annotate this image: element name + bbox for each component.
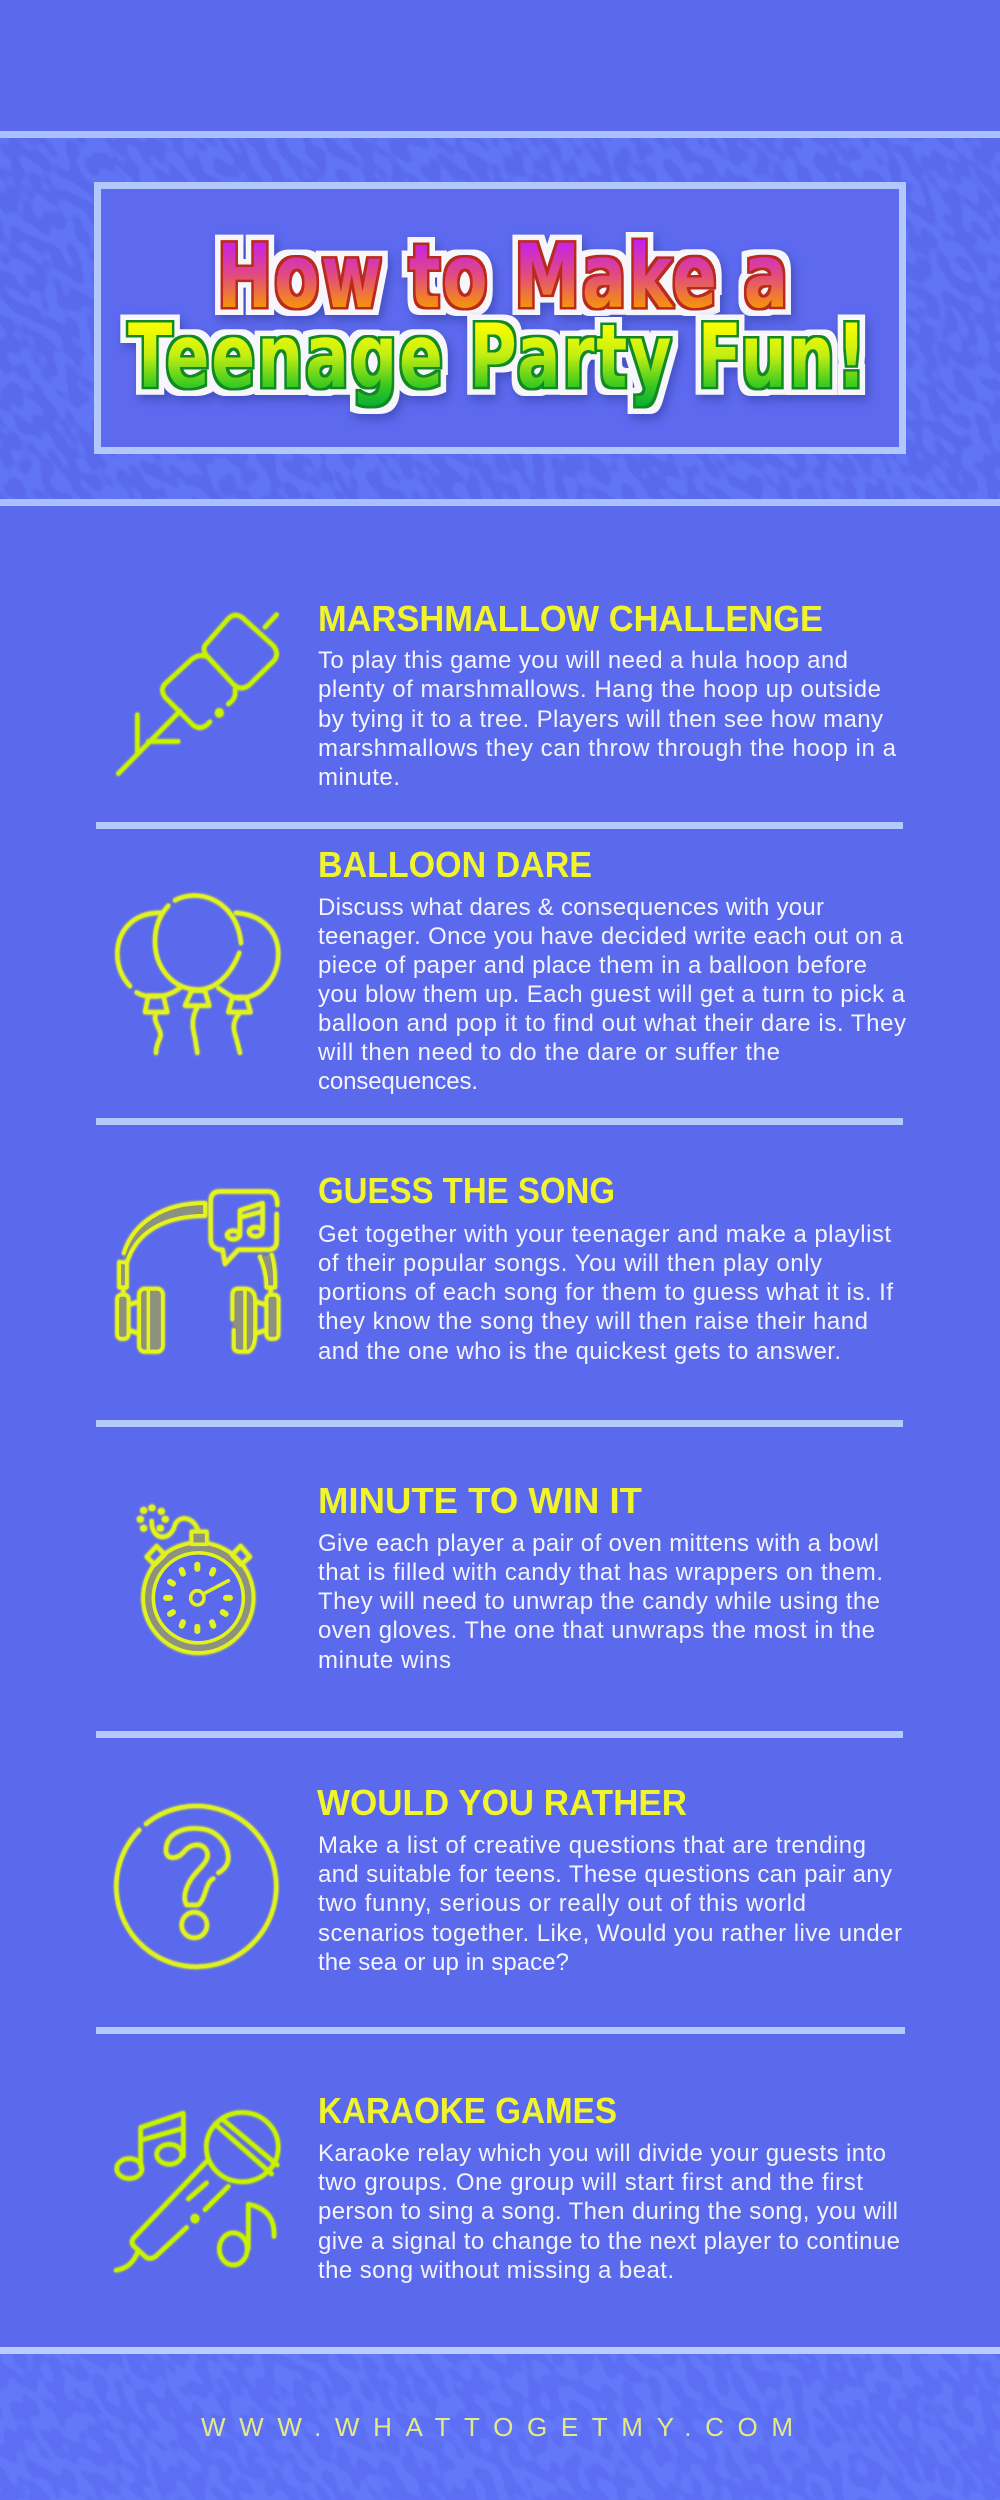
- body text: of their popular songs. You will then play only: [318, 1250, 822, 1277]
- body text: teenager. Once you have decided write each out on a: [318, 923, 904, 950]
- panel: balloon dare: [117, 844, 906, 1095]
- body text: marshmallows they can throw through the hoop in a: [318, 735, 897, 762]
- body text: two groups. One group will start first and the first: [318, 2169, 863, 2196]
- body text: minute wins: [318, 1647, 451, 1674]
- body text: Make a list of creative questions that are trending: [318, 1832, 866, 1859]
- icon: microphone and music notes: [116, 2112, 278, 2270]
- body text: To play this game you will need a hula hoop and: [318, 647, 848, 674]
- title line 1: How to Make a: [217, 225, 790, 328]
- icon: balloons: [117, 895, 278, 1053]
- body text: minute.: [318, 764, 400, 791]
- body text: you blow them up. Each guest will get a turn to pick a: [318, 981, 906, 1008]
- body text: portions of each song for them to guess what it is. If: [318, 1279, 893, 1306]
- body text: scenarios together. Like, Would you rather live under: [318, 1920, 902, 1947]
- icon: stopwatch with fuse: [140, 1508, 253, 1653]
- footer top rule: [0, 2347, 1000, 2354]
- body text: [318, 2140, 900, 2284]
- body text: the sea or up in space?: [318, 1949, 569, 1976]
- body text: piece of paper and place them in a balloon before: [318, 952, 867, 979]
- body text: [317, 894, 906, 1095]
- body text: will then need to do the dare or suffer the: [317, 1039, 780, 1066]
- divider: [96, 1118, 903, 1125]
- body text: Karaoke relay which you will divide your guests into: [318, 2140, 886, 2167]
- body text: Get together with your teenager and make a playlist: [318, 1221, 891, 1248]
- icon: marshmallows on a stick: [118, 615, 277, 774]
- divider: [96, 1420, 903, 1427]
- body text: [318, 1832, 902, 1976]
- body text: the song without missing a beat.: [318, 2257, 674, 2284]
- body text: and suitable for teens. These questions can pair any: [318, 1861, 892, 1888]
- body text: that is filled with candy that has wrappers on them.: [318, 1559, 883, 1586]
- heading: GUESS THE SONG: [318, 1170, 615, 1211]
- heading: BALLOON DARE: [318, 844, 592, 885]
- body text: and the one who is the quickest gets to answer.: [318, 1338, 841, 1365]
- body text: balloon and pop it to find out what their dare is. They: [318, 1010, 906, 1037]
- header bottom rule: [0, 499, 1000, 506]
- body text: two funny, serious or really out of this world: [318, 1890, 806, 1917]
- body text: [318, 1530, 883, 1674]
- body text: [318, 1221, 893, 1365]
- body text: [318, 647, 897, 791]
- header top rule: [0, 131, 1000, 138]
- panel: karaoke games: [116, 2090, 900, 2284]
- panel: guess the song: [117, 1170, 893, 1365]
- title box: [98, 186, 902, 450]
- divider: [96, 822, 903, 829]
- body text: person to sing a song. Then during the song, you will: [318, 2198, 898, 2225]
- divider: [96, 1731, 903, 1738]
- header band pattern: [0, 137, 1000, 499]
- body text: Discuss what dares & consequences with your: [318, 894, 824, 921]
- panel: would you rather: [116, 1782, 902, 1976]
- footer website: WWW.WHATTOGETMY.COM: [201, 2412, 793, 2442]
- body text: They will need to unwrap the candy while using the: [318, 1588, 880, 1615]
- body text: oven gloves. The one that unwraps the most in the: [318, 1617, 875, 1644]
- heading: MINUTE TO WIN IT: [318, 1480, 642, 1521]
- body text: consequences.: [318, 1068, 478, 1095]
- footer band pattern: [0, 2354, 1000, 2500]
- body text: they know the song they will then raise their hand: [318, 1308, 868, 1335]
- body text: give a signal to change to the next player to continue: [318, 2228, 900, 2255]
- heading: WOULD YOU RATHER: [317, 1782, 687, 1823]
- title: [128, 225, 868, 408]
- body text: Give each player a pair of oven mittens with a bowl: [318, 1530, 879, 1557]
- heading: MARSHMALLOW CHALLENGE: [318, 598, 823, 639]
- body text: by tying it to a tree. Players will then see how many: [318, 706, 883, 733]
- divider: [96, 2027, 905, 2034]
- icon: question mark in circle: [116, 1806, 276, 1967]
- panel: marshmallow challenge: [118, 598, 897, 791]
- icon: headphones with music note bubble: [117, 1191, 278, 1351]
- heading: KARAOKE GAMES: [318, 2090, 617, 2131]
- body text: plenty of marshmallows. Hang the hoop up outside: [318, 676, 881, 703]
- panel: minute to win it: [140, 1480, 883, 1674]
